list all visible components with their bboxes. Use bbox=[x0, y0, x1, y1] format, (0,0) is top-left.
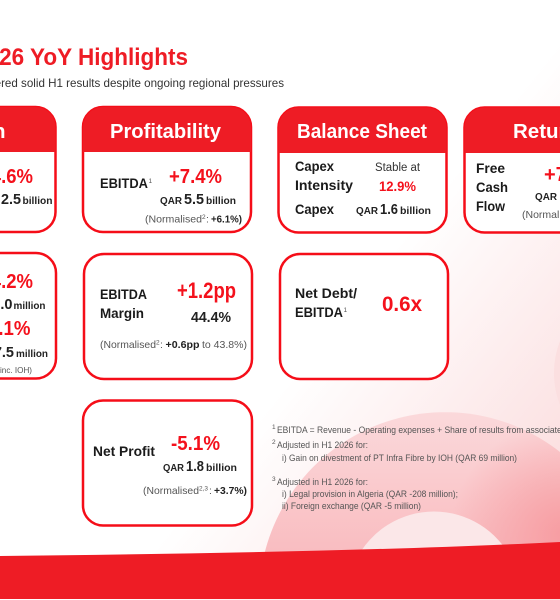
EBITDA margin label bbox=[100, 286, 147, 321]
EBITDA amount: QAR bbox=[160, 195, 182, 207]
first amount: million bbox=[14, 300, 46, 312]
EBITDA margin normalised: (Normalised bbox=[100, 339, 156, 351]
first amount bbox=[0, 297, 46, 313]
footnote 2: i) Gain on divestment of PT Infra Fibre by IOH (QAR 69 million) bbox=[282, 453, 517, 463]
net profit normalised: : bbox=[209, 485, 212, 497]
footnote 3: Adjusted in H1 2026 for: bbox=[277, 477, 368, 487]
EBITDA margin normalised: 2 bbox=[156, 340, 160, 346]
footnote 3: i) Legal provision in Algeria (QAR -208 million); bbox=[282, 489, 458, 499]
EBITDA normalised bbox=[145, 214, 242, 226]
net profit change: -5.1% bbox=[171, 433, 220, 455]
EBITDA margin normalised: +0.6pp bbox=[166, 339, 200, 351]
EBITDA amount: 5.5 bbox=[184, 192, 204, 208]
panel: returns bbox=[464, 108, 560, 232]
net profit label: Net Profit bbox=[93, 443, 155, 459]
heading: profitability: Profitability bbox=[110, 120, 222, 143]
EBITDA label: 1 bbox=[148, 178, 152, 185]
net profit amount: 1.8 bbox=[186, 459, 204, 475]
heading: balance sheet: Balance Sheet bbox=[297, 120, 427, 143]
footnote 2: Adjusted in H1 2026 for: bbox=[277, 440, 368, 450]
EBITDA normalised: +6.1%) bbox=[211, 214, 242, 226]
bottom red band bbox=[0, 542, 560, 599]
revenue amount bbox=[1, 192, 52, 208]
free cash flow amount: QAR bbox=[535, 191, 557, 203]
footnote 2: 2 bbox=[272, 439, 276, 446]
panel: growth revenue bbox=[0, 107, 56, 232]
panel: net profit bbox=[83, 400, 252, 526]
free cash flow label: Free bbox=[476, 160, 505, 176]
free cash flow label: Cash bbox=[476, 179, 508, 195]
first amount: .0 bbox=[0, 297, 12, 313]
second amount bbox=[0, 345, 48, 361]
footnote 3: ii) Foreign exchange (QAR -5 million) bbox=[282, 501, 421, 511]
capex amount: QAR bbox=[356, 205, 378, 217]
EBITDA amount bbox=[160, 192, 236, 208]
footnote 3 bbox=[272, 476, 458, 511]
capex amount: billion bbox=[400, 205, 431, 217]
panel: balance sheet bbox=[278, 108, 446, 232]
net debt label: Net Debt/ bbox=[295, 285, 357, 301]
EBITDA margin normalised: to 43.8%) bbox=[202, 339, 247, 351]
capex label: Capex bbox=[295, 201, 334, 217]
EBITDA normalised: (Normalised bbox=[145, 214, 202, 226]
net profit amount bbox=[163, 459, 237, 475]
net debt label: 1 bbox=[344, 307, 348, 314]
EBITDA label: EBITDA bbox=[100, 175, 148, 191]
net profit normalised: (Normalised bbox=[143, 485, 199, 497]
footnote 2 bbox=[272, 439, 517, 463]
free cash flow label bbox=[476, 160, 508, 214]
net profit normalised bbox=[143, 485, 247, 497]
capex intensity label: Capex bbox=[295, 158, 334, 174]
capex intensity value bbox=[375, 162, 421, 194]
EBITDA margin normalised: : bbox=[160, 339, 163, 351]
EBITDA margin normalised bbox=[100, 339, 247, 351]
capex amount bbox=[356, 202, 431, 218]
panel: net debt bbox=[280, 254, 448, 379]
panel: growth customers bbox=[0, 253, 56, 378]
EBITDA change: +7.4% bbox=[169, 166, 222, 188]
EBITDA margin change: +1.2pp bbox=[177, 278, 236, 303]
footnote 1: 1 bbox=[272, 424, 276, 431]
revenue amount: 2.5 bbox=[1, 192, 21, 208]
panel: EBITDA margin bbox=[84, 254, 252, 379]
second amount: million bbox=[16, 348, 48, 360]
EBITDA normalised: : bbox=[206, 214, 209, 226]
capex intensity value: Stable at bbox=[375, 162, 421, 174]
capex intensity label bbox=[295, 158, 353, 193]
capex intensity label: Intensity bbox=[295, 177, 353, 193]
capex intensity value: 12.9% bbox=[379, 179, 416, 194]
free cash flow label: Flow bbox=[476, 198, 505, 214]
net debt label bbox=[295, 285, 357, 320]
note: including IOH: inc. IOH) bbox=[0, 365, 32, 375]
EBITDA margin label: EBITDA bbox=[100, 286, 147, 302]
panel: profitability bbox=[83, 107, 251, 232]
EBITDA margin label: Margin bbox=[100, 305, 144, 321]
net profit amount: QAR bbox=[163, 462, 184, 474]
EBITDA margin value: 44.4% bbox=[191, 310, 231, 326]
EBITDA amount: billion bbox=[206, 195, 236, 207]
net profit normalised: 2,3 bbox=[199, 486, 208, 492]
revenue amount: billion bbox=[22, 195, 52, 207]
net profit normalised: +3.7%) bbox=[214, 485, 247, 497]
net debt label: EBITDA bbox=[295, 304, 343, 320]
net profit amount: billion bbox=[206, 462, 237, 474]
capex amount: 1.6 bbox=[380, 202, 398, 218]
footnote 3: 3 bbox=[272, 476, 276, 483]
EBITDA normalised: 2 bbox=[202, 214, 206, 221]
net debt value: 0.6x bbox=[382, 293, 422, 316]
